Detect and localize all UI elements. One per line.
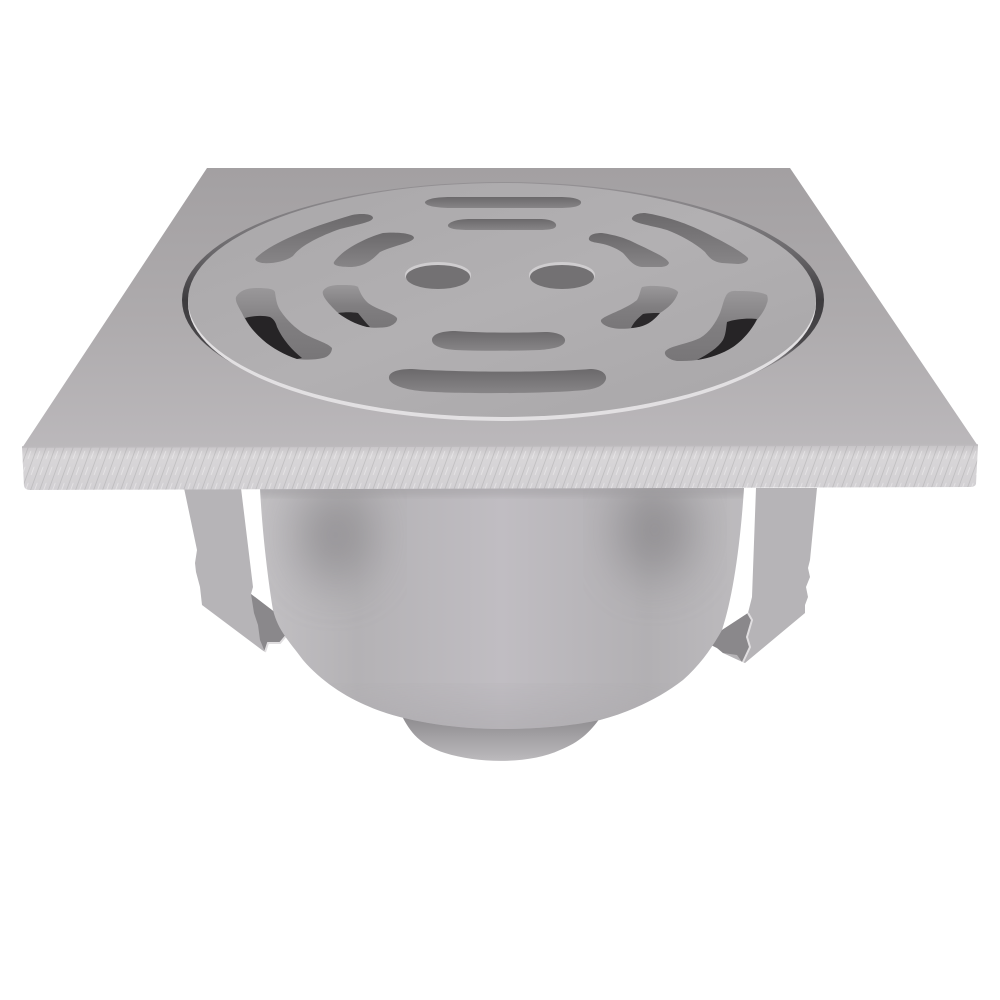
slot: upper left inner: [334, 233, 414, 267]
slot: upper right inner: [589, 233, 669, 267]
product photo: floor drain: [22, 168, 978, 761]
slot: bottom outer: [389, 369, 606, 393]
threaded outlet neck: [402, 716, 600, 761]
grate face: [188, 183, 816, 417]
cover plate front edge: [22, 445, 978, 490]
slot: top outer: [425, 197, 581, 208]
slot: upper left outer: [255, 214, 373, 263]
slot: right inner: [601, 286, 678, 329]
drain bowl body: [260, 488, 744, 729]
grate bottom highlight: [188, 185, 816, 421]
right mounting clip: [707, 488, 817, 663]
slot: left inner: [323, 285, 397, 328]
slot: left outer: [236, 288, 332, 360]
slot: upper right outer: [632, 213, 748, 264]
square cover plate top: [22, 168, 978, 448]
recess groove: [182, 182, 824, 418]
slot: bottom inner: [432, 331, 565, 351]
hole: left: [405, 262, 471, 289]
left mounting clip: [184, 488, 298, 652]
slot: top inner: [448, 219, 556, 230]
hole: right: [529, 262, 595, 289]
slot: right outer: [665, 291, 768, 361]
circular grate: [182, 182, 824, 421]
